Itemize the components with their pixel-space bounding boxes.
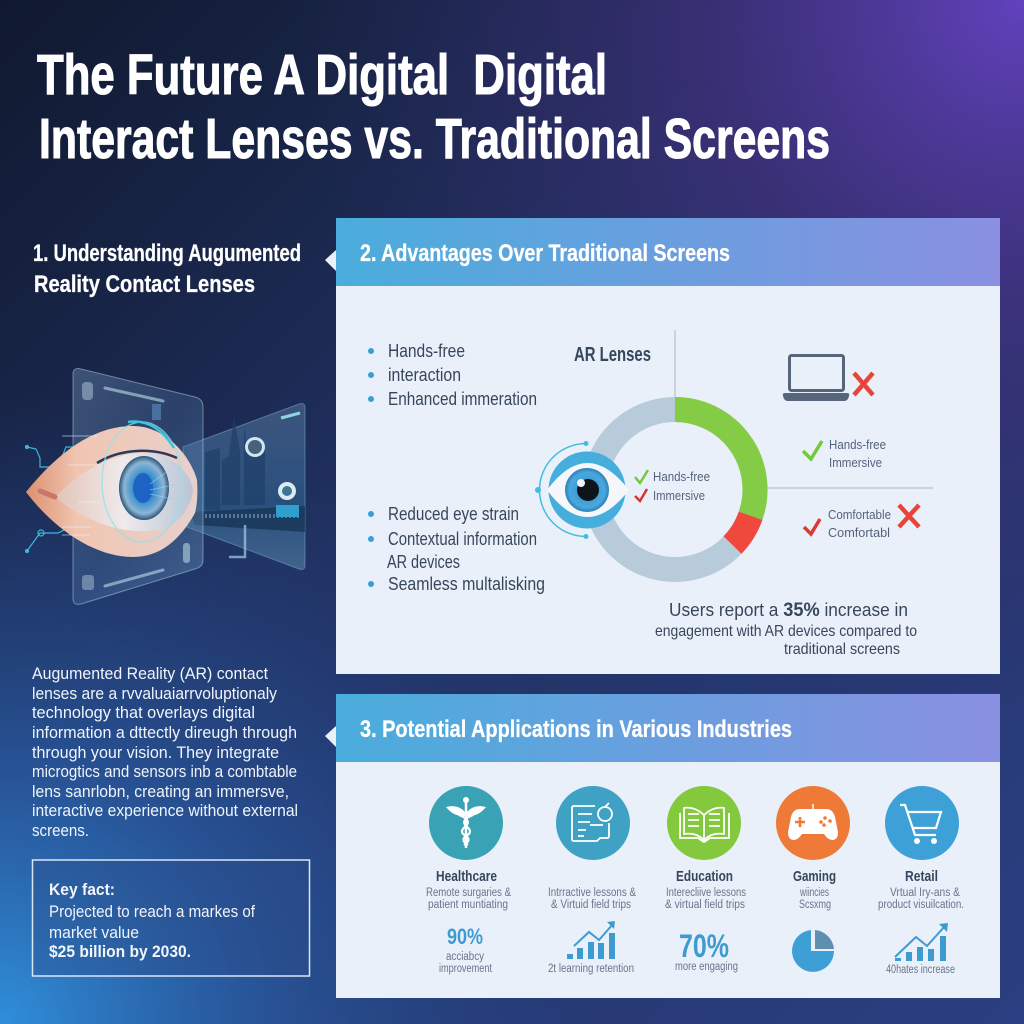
panel header: section 2 <box>336 218 1000 286</box>
list: AR benefits top: Hands-free <box>388 341 465 361</box>
text block: AR description: information a dttectly direugh through <box>32 723 297 742</box>
text block: 35% statistic: engagement with AR devices compared to <box>655 623 917 640</box>
list: AR benefits bottom: AR devices <box>387 552 460 572</box>
list: AR benefits bottom: Contextual information <box>388 529 537 549</box>
column: gaming: Scsxmg <box>799 899 831 911</box>
panel: advantages over traditional screens <box>336 218 1000 674</box>
text block: 35% statistic <box>655 600 917 658</box>
column: retail: Retail <box>905 868 938 885</box>
icon: caduceus <box>429 786 503 860</box>
callout: key fact <box>32 860 310 976</box>
callout: key fact: market value <box>49 923 139 942</box>
column: gaming <box>776 786 850 972</box>
comparison: comfortable: Comfortable <box>828 507 891 522</box>
column: interactive lessons: Intrractive lessons & <box>548 887 636 899</box>
panel header: section 2: 2. Advantages Over Traditional Screens <box>360 240 730 267</box>
column: gaming: Gaming <box>793 868 836 885</box>
text block: AR description: screens. <box>32 821 89 840</box>
text block: AR description: Augumented Reality (AR) contact <box>32 664 268 683</box>
callout: key fact: Projected to reach a markes of <box>49 902 255 921</box>
column: interactive lessons <box>548 786 636 975</box>
column: healthcare: Remote surgaries & <box>426 887 511 899</box>
icon: checklist with apple <box>556 786 630 860</box>
column: healthcare: improvement <box>439 963 493 975</box>
column: education: Education <box>676 868 733 885</box>
column: education: 70% <box>679 928 729 964</box>
text block: 35% statistic: traditional screens <box>784 641 900 658</box>
comparison inside donut: Hands-free <box>653 469 710 484</box>
text block: AR description <box>32 664 298 840</box>
list: AR benefits bottom <box>368 504 545 594</box>
icon: shopping cart <box>885 786 959 860</box>
comparison: hands-free, immersive: Immersive <box>829 455 882 470</box>
text block: AR description: microgtics and sensors inb a combtable <box>32 762 297 781</box>
pointer: section 3 <box>325 726 336 747</box>
text block: 35% statistic: Users report a 35% increase in <box>669 600 908 621</box>
heading: section 1: 1. Understanding Augumented <box>33 240 301 267</box>
title <box>37 43 830 171</box>
chart: rising bars <box>567 921 615 959</box>
eye <box>26 422 197 557</box>
comparison: hands-free, immersive: Hands-free <box>829 437 886 452</box>
text block: AR description: through your vision. They integrate <box>32 743 279 762</box>
panel: potential applications <box>336 694 1000 998</box>
column: gaming: wiincies <box>799 887 829 899</box>
column: retail <box>878 786 964 976</box>
text block: AR description: interactive experience without external <box>32 801 298 820</box>
text block: AR description: technology that overlays digital <box>32 703 255 722</box>
AR screen: interface panel <box>73 369 203 604</box>
comparison: hands-free, immersive <box>803 437 886 470</box>
comparison: comfortable: Comfortabl <box>828 525 890 540</box>
chart: rising bars <box>895 923 948 961</box>
column: healthcare: Healthcare <box>436 868 497 885</box>
icon: laptop with cross <box>783 356 873 401</box>
column: healthcare: patient muntiating <box>428 899 508 911</box>
column: retail: 40hates increase <box>886 964 955 976</box>
AR screen: city view <box>183 404 305 570</box>
comparison: comfortable <box>804 505 919 540</box>
list: AR benefits top: interaction <box>388 365 461 385</box>
heading: section 1 <box>33 240 301 298</box>
column: education: Interecliive lessons <box>666 887 746 899</box>
panel header: section 3 <box>336 694 1000 762</box>
panel header: section 3: 3. Potential Applications in Various Industries <box>360 716 792 743</box>
list: AR benefits top <box>368 341 537 409</box>
donut chart <box>595 410 755 570</box>
circuit lines <box>26 446 85 552</box>
column: interactive lessons: 2t learning retention <box>548 963 634 975</box>
icon: eye <box>535 441 629 539</box>
text block: AR description: lenses are a rvvaluaiarrvoluptionaly <box>32 684 277 703</box>
column: healthcare: 90% <box>447 924 483 949</box>
chart: pie <box>792 930 834 972</box>
comparison inside donut <box>635 469 710 503</box>
callout: key fact: Key fact: <box>49 880 115 899</box>
illustration: eye with AR screens <box>26 369 305 604</box>
icon: open book <box>667 786 741 860</box>
callout: key fact: $25 billion by 2030. <box>49 942 191 961</box>
heading: AR Lenses: AR Lenses <box>574 344 651 366</box>
column: healthcare <box>426 786 511 975</box>
column: education <box>665 786 746 973</box>
text block: AR description: lens sanrlobn, creating an immersve, <box>32 782 289 801</box>
column: education: & virtual field trips <box>665 899 745 911</box>
column: healthcare: acciabcy <box>446 951 484 963</box>
pointer: section 2 <box>325 250 336 271</box>
column: education: more engaging <box>675 961 738 973</box>
comparison inside donut: Immersive <box>653 488 705 503</box>
list: AR benefits top: Enhanced immeration <box>388 389 537 409</box>
title: The Future A Digital Digital <box>37 43 607 107</box>
heading: section 1: Reality Contact Lenses <box>34 271 255 298</box>
icon: game controller <box>776 786 850 860</box>
column: retail: Vrtual Iry-ans & <box>890 887 960 899</box>
column: interactive lessons: & Virtuid field trips <box>551 899 631 911</box>
column: retail: product visuilcation. <box>878 899 964 911</box>
list: AR benefits bottom: Seamless multalisking <box>388 574 545 594</box>
list: AR benefits bottom: Reduced eye strain <box>388 504 519 524</box>
